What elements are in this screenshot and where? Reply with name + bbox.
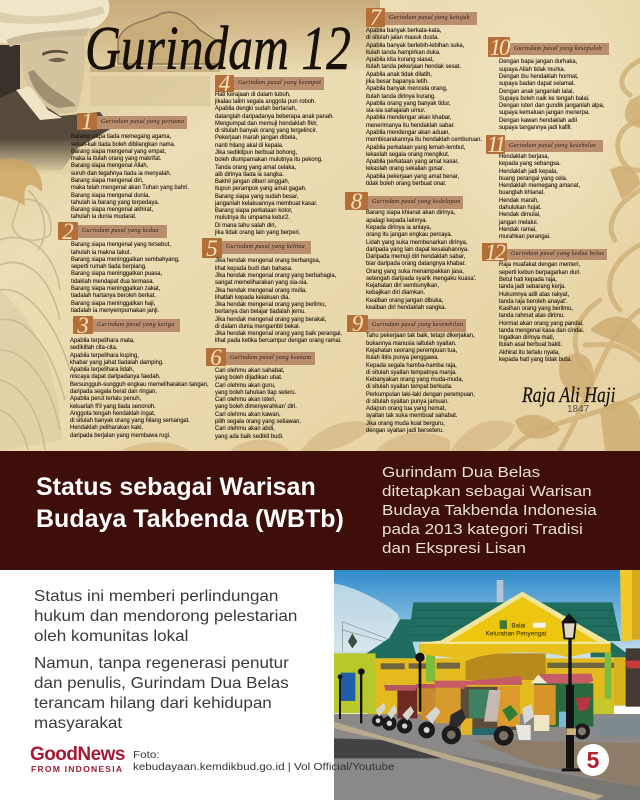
building at right [620,570,640,642]
heading 12: Gurindam pasal yang kedua belas [511,251,604,257]
heading 10: Gurindam pasal yang kesepuluh [514,46,602,52]
heading 8 [368,196,463,209]
heading 2 [78,225,167,238]
heading 1 [97,116,187,129]
heading 3: Gurindam pasal yang ketiga [97,322,175,328]
tuk-tuk front [442,676,534,746]
logo: GoodNews from Indonesia [30,744,125,774]
walls [367,658,614,715]
lamp posts [338,613,581,771]
photo credit: Foto: [133,750,160,761]
band description: ditetapkan sebagai Warisan [382,483,592,500]
number 7 [366,8,385,27]
text 3: Apabila terpelihara mata, sedikitlah cita-cita. Apabila terpelihara kuping, khabar yang jahat tiadalah damping. Apabila terpelihara lidah, niscaya dapat daripadanya faedah. Bersungguh-sungguh engkau memeliharakan tangan, daripada segala berat dan ringan. Apabila perut terlalu penuh, keluarlah fi'il yang tiada senonoh. Anggota tengah hendaklah ingat, di situlah banyak orang yang hilang semangat. Hendaklah peliharakan kaki, daripada berjalan yang membawa rugi. [70,337,209,439]
badge: page number 5: 5 [587,747,599,773]
text 7: Apabila banyak berkata-kata, di situlah jalan masuk dusta. Apabila banyak berlebih-lebihan suka, itulah tanda hampirkan duka. Apabila kita kurang siasat, itulah tanda pekerjaan hendak sesat. Apabila anak tidak dilatih, jika besar bapanya letih. Apabila banyak mencela orang, itulah tanda dirinya kurang. Apabila orang yang banyak tidur, sia-sia sahajalah umur. Apabila mendengar akan khabar, menerimanya itu hendaklah sabar. Apabila mendengar akan aduan, membicarakannya itu hendaklah cemburuan. Apabila perkataan yang lemah-lembut, lekaslah segala orang mengikut. Apabila perkataan yang amat kasar, lekaslah orang sekalian gusar. Apabila pekerjaan yang amat benar, tidak boleh orang berbuat onar. [366,27,482,187]
text 5: Jika hendak mengenal orang berbangsa, lihat kepada budi dan bahasa. Jika hendak mengenal orang yang berbahagia, sangat memeliharakan yang sia-sia. Jika hendak mengenal orang mulia, lihatlah kepada kelakuan dia. Jika hendak mengenal orang yang berilmu, bertanya dan belajar tiadalah jemu. Jika hendak mengenal orang yang berakal, di dalam dunia mengambil bekal. Jika hendak mengenal orang yang baik perangai, lihat pada ketika bercampur dengan orang ramai. [215,257,342,344]
text 2: Barang siapa mengenal yang tersebut, tahulah ia makna takut. Barang siapa meninggalkan sembahyang, seperti rumah tiada berpiang. Barang siapa meninggalkan puasa, tidaklah mendapat dua termasa. Barang siapa meninggalkan zakat, tiadalah hartanya beroleh berkat. Barang siapa meninggalkan haji, tiadalah ia menyempurnakan janji. [71,241,180,314]
section 11 [486,135,603,240]
section 2 [58,222,180,314]
section 9 [347,315,475,434]
signature: Raja Ali Haji 1847: Raja Ali Haji [522,382,616,407]
band description [382,464,597,557]
paragraph: threat [34,655,289,732]
paragraph: threat: dan penulis, Gurindam Dua Belas [34,675,289,692]
photo: Balai Kelurahan Penyengat: Kelurahan Penyengat [486,630,547,637]
heading 5 [222,241,311,254]
title: Gurindam 12: Gurindam 12 [85,15,351,83]
number 3 [73,316,93,334]
paragraph: protection: oleh komunitas lokal [34,628,188,645]
section 4 [214,75,334,236]
heading 6 [226,352,315,365]
paragraph: protection: Status ini memberi perlindungan [34,588,278,605]
portrait [0,0,115,206]
heading 5: Gurindam pasal yang kelima [226,244,305,250]
number 9 [347,315,368,332]
text 1: Barang siapa tiada memegang agama, sekali-kali tiada boleh dibilangkan nama. Barang siapa mengenal yang empat, maka ia itulah orang yang makrifat. Barang siapa mengenal Allah, suruh dan tegahnya tiada ia menyalah. Barang siapa mengenal diri, maka telah mengenal akan Tuhan yang bahri. Barang siapa mengenal dunia, tahulah ia barang yang terpedaya. Barang siapa mengenal akhirat, tahulah ia dunia mudarat. [71,133,189,220]
heading 10 [510,43,609,55]
heading 9: Gurindam pasal yang kesembilan [372,322,463,328]
paragraph: protection [34,588,297,645]
band description: Gurindam Dua Belas [382,464,540,481]
text 10: Dengan bapa jangan durhaka, supaya Allah tidak murka. Dengan ibu hendaklah hormat, supaya badan dapat selamat. Dengan anak janganlah lalai, Supaya boleh naik ke tengah balai. Dengan isteri dan gundik janganlah alpa, supaya kemaluan jangan menerpa. Dengan kawan hendaklah adil supaya tangannya jadi kafill. [499,58,604,131]
ornaments: right swirls [510,60,640,450]
tuk-tuk green right [531,674,593,739]
heading 1: Gurindam pasal yang pertama [101,119,184,125]
photo credit: kebudayaan.kemdikbud.go.id | Vol Official/Youtube [133,762,394,773]
heading 11: Gurindam pasal yang kesebelas [509,143,596,149]
logo: GoodNews from Indonesia: FROM INDONESIA [31,764,123,774]
photo: Balai Kelurahan Penyengat: Balai [511,623,525,630]
band description: dan Ekspresi Lisan [382,540,526,557]
heading 6: Gurindam pasal yang keenam [230,355,311,361]
tuk-tuks back row [372,681,467,738]
section 10 [488,37,609,131]
heading 9 [368,319,466,332]
ornament frame behind title [118,12,222,64]
heading 7: Gurindam pasal yang ketujuh [389,15,470,21]
number 8 [345,192,368,210]
heading 4 [234,77,324,90]
band heading: Status sebagai Warisan [36,473,316,501]
main roof [408,602,621,642]
section 1 [71,113,189,220]
band description: Budaya Takbenda Indonesia [382,502,597,519]
section 7 [366,8,482,187]
photo: Balai Kelurahan Penyengat [334,570,640,800]
band heading: Budaya Takbenda (WBTb) [36,505,344,533]
tower and wires [497,580,503,603]
heading 2: Gurindam pasal yang kedua [82,228,159,234]
text 6: Cari olehmu akan sahabat, yang boleh dijadikan ubat. Cari olehmu akan guru, yang boleh tahukan tiap seteru. Cari olehmu akan isteri, yang boleh dimenyerahkan' diri. Cari olehmu akan kawan, pilih segala orang yang setiawan. Cari olehmu akan abdi, yang ada baik sedikit budi. [215,367,301,440]
number 4 [215,75,234,92]
heading 3 [93,319,180,332]
sign text [500,620,507,629]
logo: GoodNews from Indonesia: GoodNews [30,744,125,765]
band: heritage status [0,451,640,570]
paragraph: threat: terancam hilang dari kehidupan [34,695,272,712]
porch [419,643,611,661]
ground [334,714,640,800]
paragraph: protection: hukum dan mendorong pelestarian [34,608,297,625]
text 9: Tahu pekerjaan tak baik, tetapi dikerjakan, bukannya manusia ialtulah syaitan. Kejahatan seorang perempuan tua, itulah iblis punya penggawa. Kepada segala hamba-hamba raja, di situlah syaitan tempatnya manja. Kebanyakan orang yang muda-muda, di situlah syaitan tempat berkuda. Perkumpulan laki-laki dengan perempuan, di situlah syaitan punya jamuan. Adapun orang tua yang hemat, syaitan tak suka membuat sahabat. Jika orang muda kuat berguru, dengan syaitan jadi berseteru. [366,332,475,434]
parchment background with ornaments and portrait [0,0,640,451]
ornaments: left floral lines [0,190,70,450]
band heading [36,473,344,533]
band description: pada 2013 kategori Tradisi [382,521,583,538]
text 12: Raja muafakat dengan menteri, seperti kebun berpagarkan duri. Betul hati kepada raja, tanda jadi sebarang kerja. Hukumnya adil atas rakyat, tanda raja beroleh anayat'. Kasihan orang yang berilmu, tanda rahmat atas dirimu. Hormat akan orang yang pandai, tanda mengenal kasa dan cindai. Ingatkan dirinya mati, itulah asal berbuat bakti. Akhirat itu terlalu nyata, kepada hati yang tidak buta. [499,261,584,363]
signature: Raja Ali Haji 1847: 1847 [567,404,589,415]
photo credit [133,750,394,773]
section 5 [202,238,342,344]
heading 11 [505,140,603,152]
number 2 [58,222,78,240]
paragraph: threat: Namun, tanpa regenerasi penutur [34,655,289,672]
text 8: Barang siapa khianat akan dirinya, apalagi kepada lainnya. Kepada dirinya ia aniaya, orang itu jangan engkau percaya. Lidah yang suka membenarkan dirinya, daripada yang lain dapat kesalahannya. Daripada memuji diri hendaklah sabar, biar daripada orang datangnya khabar. Orang yang suka menampakkan jasa, setengah daripada syarik mengaku kuasa'. Kejahatan diri sembunyikan, kebajikan diri diamkan. Keaiban orang jangan dibuka, keaiban diri hendaklah sangka. [366,209,476,311]
heading 4: Gurindam pasal yang keempat [238,80,321,86]
section 3 [70,316,209,439]
section 8 [345,192,476,311]
paragraph: threat: masyarakat [34,715,122,732]
number 6 [206,348,226,366]
heading 7 [385,12,477,25]
ornaments: bottom leaves [120,420,515,451]
heading 8: Gurindam pasal yang kedelapan [372,199,461,205]
text 4: Hati kerajaan di dalam tubuh, jikalau lalim segala anggota pun roboh. Apabila dengki sudah bertanah, datanglah daripadanya beberapa anak panah. Mengumpat dan memuji hendaklah fikir, di situlah banyak orang yang tergelincir. Pekerjaan marah jangan dibela, nanti hilang akal di kepala. Jika sedikitpun berbuat bohong, boleh diumpamakan mulutnya itu pekong. Tanda orang yang amat celaka, aib dirinya tiada ia sangka. Bakhil jangan diberi singgah, itupun perampok yang amat gagah. Barang siapa yang sudah besar, janganlah kelakuannya membuat kasar. Barang siapa perkataan kotor, mulutnya itu umpama ketur2. Di mana tahu salah diri, jika tidak orang lain yang berperi. [215,91,334,236]
right red stall [626,648,640,707]
number 1 [77,113,97,130]
heading 12 [507,249,607,260]
section 6 [206,348,315,440]
text 11: Hendaklah berjasa, kepada yang sebangsa. Hendaklah jadi kepala, buang perangai yang cela. Hendaklah memegang amanat, buanglah khianat. Hendak marah, dahulukan hujat. Hendak dimulai, jangan melalui. Hendak ramai, murahkan perangai. [499,153,580,240]
number 5 [202,238,222,258]
section 12 [482,243,607,363]
side roofs [359,619,417,658]
badge: page number 5 [577,744,609,776]
